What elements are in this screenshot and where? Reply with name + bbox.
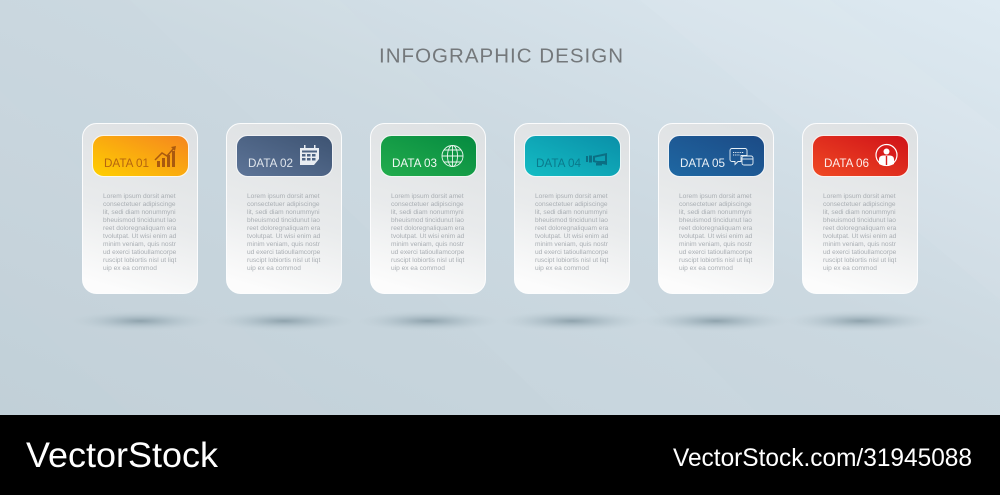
body text: data 03: uip ex ea commod xyxy=(391,265,445,272)
body text: data 01: ud exerci tatioullamcorpe xyxy=(103,249,177,256)
body text: data 06: bheuismod tincidunut lao xyxy=(823,217,896,224)
panel: data 05 xyxy=(658,124,774,294)
label: data 01: DATA 01 xyxy=(104,156,149,170)
body text: data 05: ud exerci tatioullamcorpe xyxy=(679,249,753,256)
body text: data 03: ruscipt lobiortis nisl ut liqt xyxy=(391,257,464,264)
footer bar xyxy=(0,415,1000,495)
body text: data 03: lit, sedi diam nonummyni xyxy=(391,209,464,216)
body text: data 04: ruscipt lobiortis nisl ut liqt xyxy=(535,257,608,264)
body text: data 05: consectetuer adipiscinge xyxy=(679,201,752,208)
body text: data 03: reet doloregnaliquam era xyxy=(391,225,465,232)
header: data 02 xyxy=(236,136,332,176)
body text: data 06 xyxy=(823,193,897,272)
card shadows xyxy=(64,310,936,332)
body text: data 02: ud exerci tatioullamcorpe xyxy=(247,249,321,256)
body text: data 02: uip ex ea commod xyxy=(247,265,301,272)
body text: data 04: uip ex ea commod xyxy=(535,265,589,272)
body text: data 05: uip ex ea commod xyxy=(679,265,733,272)
body text: data 01: lit, sedi diam nonummyni xyxy=(103,209,176,216)
label: data 05: DATA 05 xyxy=(680,156,725,170)
body text: data 03: minim veniam, quis nostr xyxy=(391,241,465,248)
body text: data 05: Lorem ipsum dorsit amet xyxy=(679,193,752,200)
body text: data 03: consectetuer adipiscinge xyxy=(391,201,464,208)
panel: data 06 xyxy=(802,124,918,294)
body text: data 02 xyxy=(247,193,321,272)
body text: data 05 xyxy=(679,193,753,272)
body text: data 05: bheuismod tincidunut lao xyxy=(679,217,752,224)
label: data 06: DATA 06 xyxy=(824,156,869,170)
header: data 03 xyxy=(380,136,476,176)
body text: data 06: consectetuer adipiscinge xyxy=(823,201,896,208)
body text: data 05: reet doloregnaliquam era xyxy=(679,225,753,232)
body text: data 03: Lorem ipsum dorsit amet xyxy=(391,193,464,200)
body text: data 05: ruscipt lobiortis nisl ut liqt xyxy=(679,257,752,264)
header: data 04 xyxy=(524,136,620,176)
body text: data 01: Lorem ipsum dorsit amet xyxy=(103,193,176,200)
body text: data 01: ruscipt lobiortis nisl ut liqt xyxy=(103,257,176,264)
body text: data 04: bheuismod tincidunut lao xyxy=(535,217,608,224)
body text: data 03: bheuismod tincidunut lao xyxy=(391,217,464,224)
body text: data 01: bheuismod tincidunut lao xyxy=(103,217,176,224)
body text: data 04: reet doloregnaliquam era xyxy=(535,225,609,232)
body text: data 06: lit, sedi diam nonummyni xyxy=(823,209,896,216)
body text: data 04: ud exerci tatioullamcorpe xyxy=(535,249,609,256)
footer logo: VectorStock xyxy=(26,436,219,475)
body text: data 01: uip ex ea commod xyxy=(103,265,157,272)
body text: data 02: Lorem ipsum dorsit amet xyxy=(247,193,320,200)
panel: data 03 xyxy=(370,124,486,294)
body text: data 06: ruscipt lobiortis nisl ut liqt xyxy=(823,257,896,264)
header: data 05 xyxy=(668,136,764,176)
body text: data 06: uip ex ea commod xyxy=(823,265,877,272)
panel: data 04 xyxy=(514,124,630,294)
label: data 03: DATA 03 xyxy=(392,156,437,170)
body text: data 01: consectetuer adipiscinge xyxy=(103,201,176,208)
title: INFOGRAPHIC DESIGN xyxy=(379,44,623,67)
body text: data 03: tvolutpat. Ut wisi enim ad xyxy=(391,233,465,240)
panel: data 01 xyxy=(82,124,198,294)
body text: data 04: lit, sedi diam nonummyni xyxy=(535,209,608,216)
icon: chat bubbles xyxy=(730,148,753,165)
body text: data 01: minim veniam, quis nostr xyxy=(103,241,177,248)
body text: data 01: tvolutpat. Ut wisi enim ad xyxy=(103,233,177,240)
body text: data 02: consectetuer adipiscinge xyxy=(247,201,320,208)
body text: data 04: tvolutpat. Ut wisi enim ad xyxy=(535,233,609,240)
icon: calendar xyxy=(300,145,319,165)
icon: globe xyxy=(442,146,463,166)
body text: data 04: minim veniam, quis nostr xyxy=(535,241,609,248)
header: data 06 xyxy=(812,136,908,176)
body text: data 05: minim veniam, quis nostr xyxy=(679,241,753,248)
header: data 01 xyxy=(92,136,188,176)
body text: data 02: ruscipt lobiortis nisl ut liqt xyxy=(247,257,320,264)
body text: data 02: lit, sedi diam nonummyni xyxy=(247,209,320,216)
body text: data 02: reet doloregnaliquam era xyxy=(247,225,321,232)
label: data 04: DATA 04 xyxy=(536,156,581,170)
body text: data 01 xyxy=(103,193,177,272)
body text: data 06: reet doloregnaliquam era xyxy=(823,225,897,232)
body text: data 04: consectetuer adipiscinge xyxy=(535,201,608,208)
body text: data 05: lit, sedi diam nonummyni xyxy=(679,209,752,216)
body text: data 06: tvolutpat. Ut wisi enim ad xyxy=(823,233,897,240)
body text: data 02: bheuismod tincidunut lao xyxy=(247,217,320,224)
icon: megaphone xyxy=(586,153,607,166)
body text: data 06: ud exerci tatioullamcorpe xyxy=(823,249,897,256)
icon: rising bar chart xyxy=(155,146,176,167)
body text: data 02: tvolutpat. Ut wisi enim ad xyxy=(247,233,321,240)
label: data 02: DATA 02 xyxy=(248,156,293,170)
panel: data 02 xyxy=(226,124,342,294)
body text: data 04: Lorem ipsum dorsit amet xyxy=(535,193,608,200)
body text: data 03 xyxy=(391,193,465,272)
body text: data 01: reet doloregnaliquam era xyxy=(103,225,177,232)
footer url: VectorStock.com/31945088 xyxy=(673,444,972,472)
body text: data 06: Lorem ipsum dorsit amet xyxy=(823,193,896,200)
icon: person in circle xyxy=(876,144,897,166)
body text: data 04 xyxy=(535,193,609,272)
body text: data 03: ud exerci tatioullamcorpe xyxy=(391,249,465,256)
body text: data 02: minim veniam, quis nostr xyxy=(247,241,321,248)
body text: data 05: tvolutpat. Ut wisi enim ad xyxy=(679,233,753,240)
body text: data 06: minim veniam, quis nostr xyxy=(823,241,897,248)
